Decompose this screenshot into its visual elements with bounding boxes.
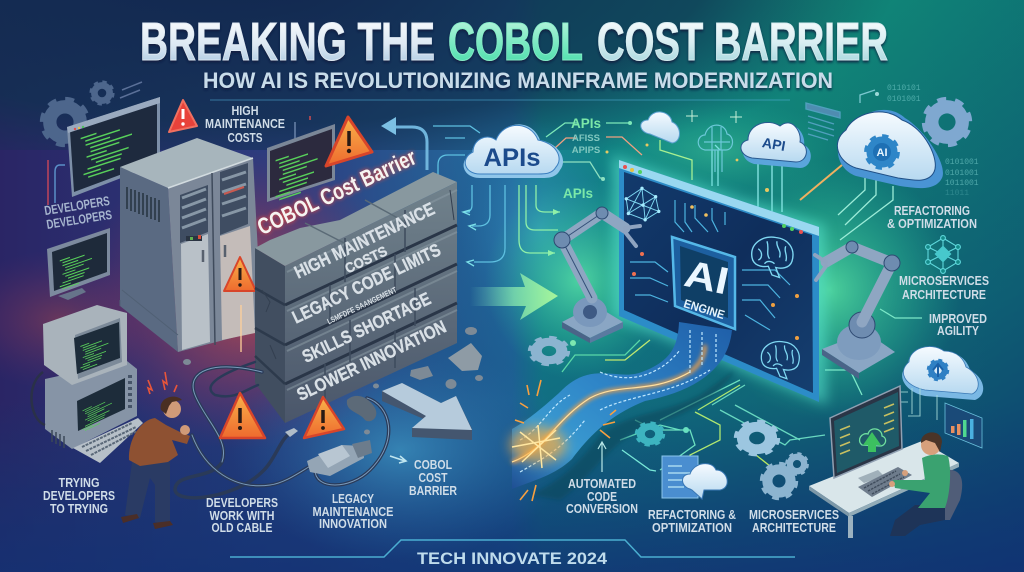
- wall label: cobol cost barrier: COBOL Cost Barrier: [253, 144, 420, 240]
- floor circuit traces: [562, 340, 862, 471]
- frustrated developer with cable: [121, 372, 190, 529]
- binary digits: 1011001: [945, 179, 979, 188]
- computer: stacked crt: [31, 305, 143, 463]
- label: improved agility: [880, 309, 987, 338]
- label: legacy maintenance innovation: [312, 491, 394, 531]
- stone wall: [253, 144, 457, 423]
- wall text: skills shortage: SKILLS SHORTAGE: [299, 288, 434, 367]
- label: refactoring top right: [887, 203, 977, 231]
- floor gears: [531, 338, 807, 497]
- title divider: [210, 99, 790, 101]
- wall text: high maintenance: HIGH MAINTENANCE: [291, 199, 438, 283]
- wall text: small: LSMFDFE SAANGEMENT: [326, 285, 398, 326]
- green transition arrow: [470, 273, 558, 320]
- ai chip: ENGINE: [682, 296, 726, 322]
- label: developers developers: DEVELOPERS: [45, 207, 113, 232]
- label: developers developers: DEVELOPERS: [43, 193, 111, 218]
- label: automated code conversion: CODE: [587, 489, 617, 504]
- cloud: small: [641, 112, 680, 143]
- icon: document and cloud: [662, 456, 727, 499]
- label: developers work with old cable: DEVELOPERS: [206, 495, 278, 510]
- ai chip: AI: [681, 253, 732, 303]
- warning icon: red: [169, 100, 197, 132]
- monitor: lower left: [47, 228, 110, 300]
- mini bar chart: [945, 403, 982, 448]
- arrow up to conversion: [598, 442, 606, 472]
- label: microservices architecture top right: [899, 273, 989, 302]
- api labels: AFISS: [572, 133, 600, 144]
- cloud: wireframe: [698, 125, 733, 172]
- title: COST BARRIER: [597, 12, 888, 72]
- label: automated code conversion: AUTOMATED: [568, 476, 636, 491]
- wall text: slower innovation: SLOWER INNOVATION: [294, 316, 449, 405]
- monitor: code window centre: [267, 124, 335, 202]
- warning icon: right floor: [304, 397, 344, 438]
- label: trying developers: DEVELOPERS: [43, 488, 115, 503]
- mainframe server: [120, 138, 262, 352]
- label: refactoring top right: & OPTIMIZATION: [887, 216, 977, 231]
- label: microservices architecture bottom: ARCHITECTURE: [752, 520, 836, 535]
- api labels: APIs: [563, 186, 593, 201]
- label: microservices architecture top right: ARCHITECTURE: [902, 287, 986, 302]
- labels: left bottom: [43, 457, 457, 535]
- ribbon shadow: [530, 370, 735, 500]
- left circuit lines: [48, 116, 310, 205]
- footer frame: [230, 540, 795, 557]
- label: refactoring top right: REFACTORING: [894, 203, 970, 218]
- cloud: API: [741, 122, 811, 168]
- warning icon: large orange: [326, 117, 372, 166]
- binary digits: 0101001: [945, 169, 979, 178]
- label: high maintenance costs: [205, 103, 285, 145]
- label: cobol cost barrier: COST: [418, 470, 448, 485]
- label: refactoring and optimization bottom: [648, 507, 736, 535]
- footer text: TECH INNOVATE 2024: [417, 549, 608, 568]
- cloud: APIs: [464, 124, 563, 178]
- label: developers work with old cable: [206, 495, 278, 535]
- cloud: AI: [837, 110, 943, 188]
- binary digits: [887, 84, 979, 198]
- label: legacy maintenance innovation: INNOVATION: [319, 516, 387, 531]
- title: BREAKING THE: [140, 12, 435, 72]
- icon: brain upper: [752, 237, 793, 278]
- wall text: costs: COSTS: [342, 243, 390, 276]
- desk data arrows: [900, 388, 937, 420]
- sparkles top: [606, 110, 769, 192]
- label: cobol cost barrier: COBOL: [414, 457, 452, 472]
- api labels: [563, 116, 601, 201]
- label: refactoring and optimization bottom: OPTIMIZATION: [652, 520, 732, 535]
- binary digits: 0101001: [945, 158, 979, 167]
- label: legacy maintenance innovation: MAINTENANCE: [312, 504, 394, 519]
- label: high maintenance costs: MAINTENANCE: [205, 116, 285, 131]
- loose plug: [285, 396, 376, 437]
- panel circuit traces: [630, 200, 799, 340]
- label: trying developers: TO TRYING: [50, 501, 108, 516]
- rubble: [183, 327, 483, 434]
- monitor: code window top left: [67, 97, 160, 197]
- title: [140, 12, 888, 72]
- api labels: APIPS: [572, 145, 600, 156]
- label: developers work with old cable: OLD CABLE: [212, 520, 273, 535]
- robot arm right: [815, 241, 900, 379]
- icon: brain lower: [761, 341, 799, 379]
- cloud: APIs: APIs: [484, 144, 540, 172]
- label: high maintenance costs: COSTS: [228, 130, 263, 145]
- label: trying developers: TRYING: [58, 475, 100, 490]
- label: cobol cost barrier: [409, 457, 457, 498]
- gear top right: [920, 95, 974, 149]
- robot arm left: [554, 207, 640, 343]
- label: cobol cost barrier: BARRIER: [409, 483, 457, 498]
- workstation and developer: [809, 386, 962, 538]
- label: improved agility: IMPROVED: [929, 311, 987, 326]
- subtitle: HOW AI IS REVOLUTIONIZING MAINFRAME MODERNIZATION: [203, 68, 833, 93]
- label: high maintenance costs: HIGH: [232, 103, 258, 118]
- connector: [307, 440, 372, 476]
- warning icon: on server: [224, 257, 256, 291]
- api traces right: [519, 90, 893, 256]
- label: trying developers: [43, 475, 115, 516]
- title: COBOL: [448, 12, 583, 72]
- ai chip: [672, 237, 735, 329]
- wall label: cobol cost barrier: [253, 144, 420, 240]
- binary digits: 11011: [945, 189, 969, 198]
- left gears: [44, 82, 142, 143]
- label: automated code conversion: CONVERSION: [566, 501, 638, 516]
- red glow bar: [238, 305, 244, 352]
- binary digits: 0101001: [887, 95, 921, 104]
- api labels: APIs: [571, 116, 601, 131]
- cloud: API: API: [761, 134, 787, 154]
- sparks: [510, 380, 616, 501]
- label: microservices architecture bottom: [749, 507, 839, 535]
- label: developers developers: [43, 193, 113, 232]
- wall text: legacy code limits: LEGACY CODE LIMITS: [289, 240, 444, 327]
- big grey arrow: [382, 383, 472, 440]
- binary digits: 0110101: [887, 84, 921, 93]
- cloud: AI: AI: [876, 147, 888, 159]
- document fragment: [806, 103, 840, 140]
- cables: [175, 362, 389, 498]
- cloud: bottom right: [902, 347, 983, 400]
- small arrow: [390, 456, 406, 463]
- label: refactoring and optimization bottom: REFACTORING &: [648, 507, 736, 522]
- return arrow: [381, 117, 427, 170]
- label: automated code conversion: [566, 476, 638, 516]
- ai engine panel: [612, 155, 827, 405]
- icon: microservices network: [926, 236, 960, 273]
- wall label: cobol cost barrier: COBOL Cost Barrier: [253, 144, 420, 240]
- api flow lines: [433, 126, 505, 266]
- icon: neural network: [625, 187, 660, 221]
- label: improved agility: AGILITY: [937, 323, 979, 338]
- code ribbon: [512, 322, 732, 489]
- label: developers work with old cable: WORK WITH: [210, 508, 274, 523]
- warning icon: left floor: [220, 393, 265, 438]
- label: microservices architecture bottom: MICROSERVICES: [749, 507, 839, 522]
- label: legacy maintenance innovation: LEGACY: [332, 491, 374, 506]
- label: microservices architecture top right: MICROSERVICES: [899, 273, 989, 288]
